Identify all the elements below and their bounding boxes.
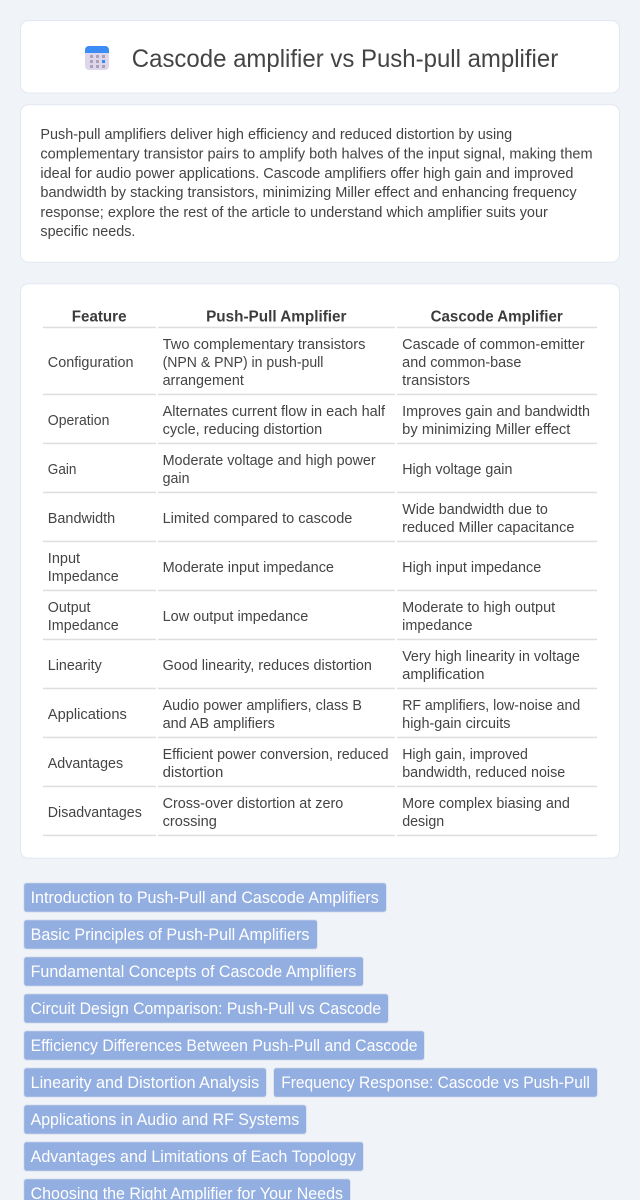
tag: basic principles — [24, 920, 317, 949]
tag: applications — [24, 1105, 306, 1134]
intro text block: response; explore the rest of the article to understand which amplifier suits your — [40, 205, 548, 221]
tag: circuit design — [24, 994, 388, 1023]
row: bandwidth: Bandwidth — [48, 511, 115, 527]
row: advantages: bandwidth, reduced noise — [402, 765, 565, 781]
tag: introduction: Introduction to Push-Pull and Cascode Amplifiers — [31, 889, 379, 907]
table header row — [43, 308, 597, 328]
row: bandwidth: Wide bandwidth due to — [402, 502, 548, 518]
row: input impedance — [43, 551, 597, 591]
tag: frequency response — [274, 1068, 598, 1097]
row: output impedance: Moderate to high output — [402, 600, 555, 616]
row: configuration: Configuration — [48, 355, 134, 371]
row: operation — [43, 404, 597, 444]
row: linearity: Good linearity, reduces distortion — [163, 658, 372, 674]
row: configuration: and common-base — [402, 355, 521, 371]
row: configuration — [43, 337, 597, 395]
row: output impedance: Output — [48, 600, 91, 616]
row: advantages: distortion — [163, 765, 223, 781]
row: advantages — [43, 747, 597, 787]
row: disadvantages: Disadvantages — [48, 805, 142, 821]
row: operation: cycle, reducing distortion — [163, 422, 322, 438]
row: configuration: (NPN & PNP) in push-pull — [163, 355, 323, 371]
row: output impedance: Low output impedance — [163, 609, 308, 625]
row: bandwidth — [43, 502, 597, 542]
tag: introduction — [24, 883, 386, 912]
row: advantages: Efficient power conversion, reduced — [163, 747, 389, 763]
header panel — [20, 20, 620, 93]
row: operation: Alternates current flow in each half — [163, 404, 385, 420]
intro text block — [40, 127, 593, 240]
tag: applications: Applications in Audio and RF Systems — [31, 1111, 299, 1129]
row: disadvantages: More complex biasing and — [402, 796, 570, 812]
panel: topic tags — [24, 883, 597, 1200]
tag: fundamental concepts — [24, 957, 363, 986]
row: operation: Improves gain and bandwidth — [402, 404, 590, 420]
tag: basic principles: Basic Principles of Push-Pull Amplifiers — [31, 926, 309, 944]
intro text block: Push-pull amplifiers deliver high efficiency and reduced distortion by using — [40, 127, 512, 143]
row: gain — [43, 453, 597, 493]
panel: comparison table — [20, 284, 620, 858]
panel: introduction — [20, 105, 620, 262]
row: advantages: Advantages — [48, 756, 123, 772]
row: linearity: Linearity — [48, 658, 103, 674]
tag: fundamental concepts: Fundamental Concepts of Cascode Amplifiers — [31, 963, 356, 981]
tag: advantages and limitations: Advantages and Limitations of Each Topology — [31, 1148, 357, 1166]
icon: calendar — [85, 46, 109, 70]
row: configuration: Two complementary transistors — [163, 337, 366, 353]
intro text block: specific needs. — [40, 224, 135, 240]
table header row: Push-Pull Amplifier — [206, 308, 346, 326]
row: bandwidth: reduced Miller capacitance — [402, 520, 574, 536]
row: output impedance — [43, 600, 597, 640]
row: input impedance: Moderate input impedance — [163, 560, 334, 576]
row: operation: by minimizing Miller effect — [402, 422, 570, 438]
row: disadvantages: Cross-over distortion at zero — [163, 796, 343, 812]
row: linearity — [43, 649, 597, 689]
table header row: Cascode Amplifier — [431, 308, 563, 326]
row: linearity: Very high linearity in voltage — [402, 649, 580, 665]
row: input impedance: High input impedance — [402, 560, 541, 576]
row: operation: Operation — [48, 413, 109, 429]
tag: choosing — [24, 1179, 350, 1200]
tag: linearity — [24, 1068, 267, 1097]
row: bandwidth: Limited compared to cascode — [163, 511, 352, 527]
row: applications — [43, 698, 597, 738]
title: Cascode amplifier vs Push-pull amplifier — [132, 45, 558, 73]
row: applications: high-gain circuits — [402, 716, 510, 732]
row: gain: Gain — [48, 462, 76, 478]
row: gain: gain — [163, 471, 190, 487]
row: configuration: transistors — [402, 373, 470, 389]
row: configuration: arrangement — [163, 373, 244, 389]
tag: efficiency: Efficiency Differences Between Push-Pull and Cascode — [31, 1037, 418, 1055]
tag: efficiency — [24, 1031, 424, 1060]
intro text block: ideal for audio power applications. Cascode amplifiers offer high gain and improved — [40, 166, 574, 182]
row: disadvantages: crossing — [163, 814, 217, 830]
tag: circuit design: Circuit Design Comparison: Push-Pull vs Cascode — [31, 1000, 381, 1018]
row: applications: Audio power amplifiers, class B — [163, 698, 362, 714]
row: disadvantages — [43, 796, 597, 836]
row: gain: High voltage gain — [402, 462, 512, 478]
row: disadvantages: design — [402, 814, 444, 830]
row: output impedance: Impedance — [48, 618, 119, 634]
row: configuration: Cascade of common-emitter — [402, 337, 585, 353]
row: applications: and AB amplifiers — [163, 716, 275, 732]
row: input impedance: Input — [48, 551, 80, 567]
tag: linearity: Linearity and Distortion Analysis — [31, 1074, 259, 1092]
row: advantages: High gain, improved — [402, 747, 528, 763]
row: linearity: amplification — [402, 667, 485, 683]
row: applications: Applications — [48, 707, 127, 723]
intro text block: bandwidth by stacking transistors, minimizing Miller effect and enhancing frequency — [40, 185, 578, 201]
tag: advantages and limitations — [24, 1142, 363, 1171]
intro text block: complementary transistor pairs to amplify both halves of the input signal, making them — [40, 146, 593, 162]
table header row: Feature — [72, 308, 127, 326]
row: gain: Moderate voltage and high power — [163, 453, 376, 469]
row: output impedance: impedance — [402, 618, 473, 634]
tag: frequency response: Frequency Response: Cascode vs Push-Pull — [281, 1074, 590, 1092]
row: input impedance: Impedance — [48, 569, 119, 585]
row: applications: RF amplifiers, low-noise and — [402, 698, 580, 714]
